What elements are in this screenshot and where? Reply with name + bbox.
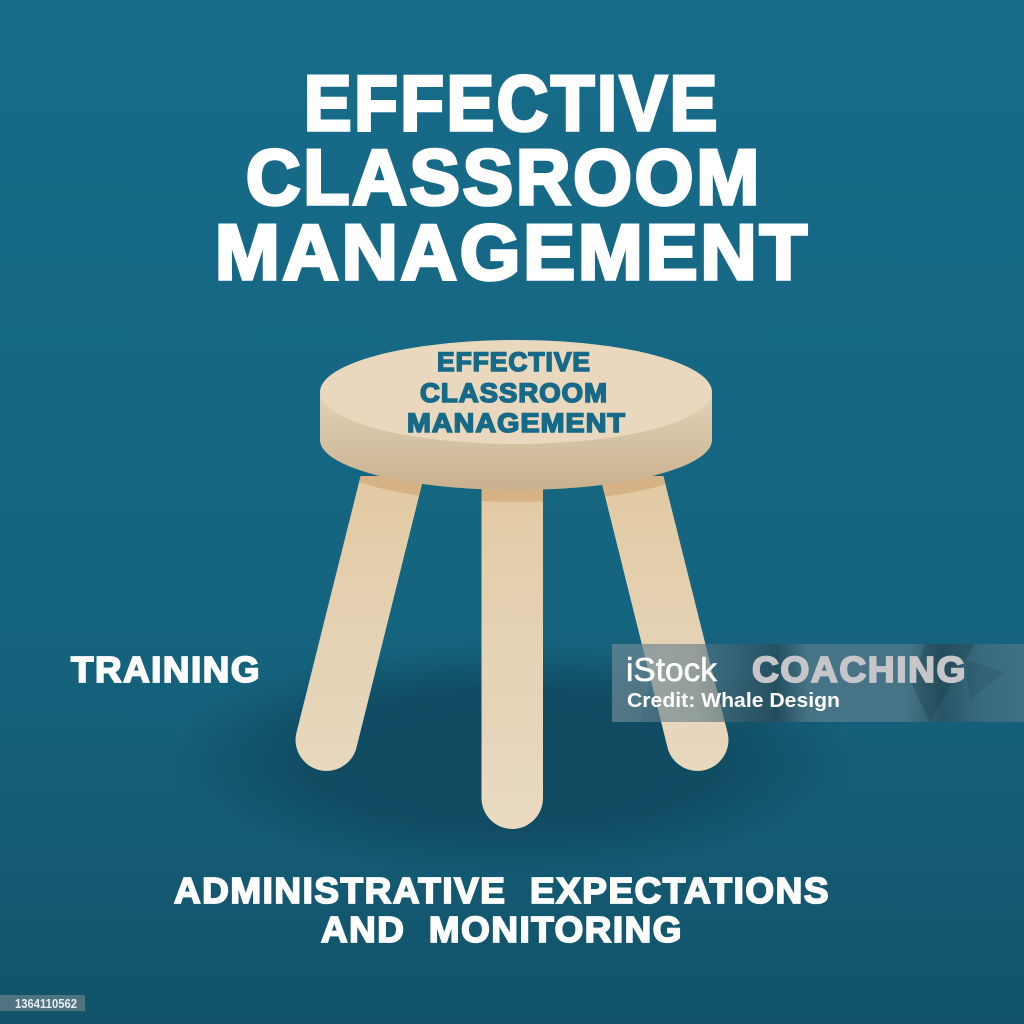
seat label: CLASSROOM: [420, 378, 608, 408]
stool: [296, 340, 728, 829]
label: administrative expectations and monitoring: [174, 870, 830, 950]
label: administrative expectations and monitoring: ADMINISTRATIVE EXPECTATIONS: [174, 870, 830, 911]
watermark logo: iStock: [626, 651, 717, 688]
seat label: [407, 347, 626, 438]
title: MANAGEMENT: [215, 208, 810, 296]
seat side: [320, 391, 712, 490]
title: [215, 59, 810, 296]
label: administrative expectations and monitoring: AND MONITORING: [321, 909, 683, 950]
watermark credit: Credit: Whale Design: [627, 690, 840, 712]
seat label: EFFECTIVE: [437, 347, 591, 377]
label: training: TRAINING: [71, 649, 261, 690]
left leg: [296, 476, 424, 771]
seat cast shadow on legs: [359, 476, 666, 502]
label: coaching: COACHING: [752, 649, 967, 690]
title: CLASSROOM: [246, 133, 762, 221]
centre leg: [482, 476, 543, 829]
watermark band: [612, 644, 1024, 722]
title: EFFECTIVE: [304, 59, 720, 147]
right leg: [600, 476, 728, 771]
seat top: [320, 340, 712, 444]
floor shadow: [167, 642, 857, 874]
seat label: MANAGEMENT: [407, 408, 626, 438]
image id badge: 1364110562: [15, 997, 77, 1011]
